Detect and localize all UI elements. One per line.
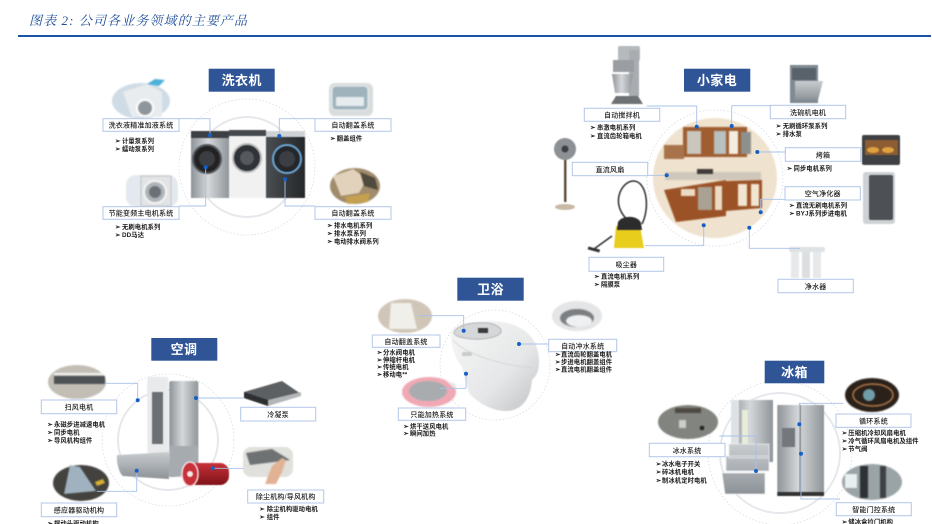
label: auto flush — [549, 339, 617, 352]
list: oven items — [787, 164, 832, 173]
label: auto lid system: 自动翻盖系统 — [331, 121, 375, 130]
list: flush items: 步进电机翻盖组件 — [561, 357, 613, 366]
list: motor items: 无刷电机系列 — [122, 222, 160, 231]
list: lid items — [377, 348, 416, 378]
label: circulation — [836, 414, 911, 427]
heading: bathroom: 卫浴 — [477, 282, 504, 297]
icon: oven — [862, 135, 900, 165]
connector lines — [645, 106, 800, 248]
icon: water purifier — [789, 247, 825, 278]
icon: pink heated seat — [402, 377, 456, 407]
list: lid items: 移动电** — [383, 369, 408, 378]
list: lid items: ➢ — [377, 357, 383, 364]
label: swing motor — [41, 400, 117, 414]
title: 图表 2: 公司各业务领域的主要产品 — [29, 13, 248, 28]
heading: bathroom — [457, 278, 524, 301]
list: purifier items: ➢ — [789, 210, 795, 217]
list: circulation items: ➢ — [842, 446, 848, 453]
list: lid items: 分水阀电机 — [383, 348, 416, 356]
icon: dishwasher — [790, 65, 823, 103]
list: circulation items: ➢ — [842, 430, 848, 437]
list: flush items: 直流电机翻盖组件 — [561, 364, 613, 373]
heading: small appliances: 小家电 — [697, 73, 737, 88]
label: auto lid — [372, 335, 440, 347]
label: condensate pump — [241, 407, 316, 421]
icon: stand mixer — [611, 46, 643, 104]
list: detergent items: ➢ — [115, 138, 121, 145]
list: purifier items: BYJ系列步进电机 — [796, 208, 848, 217]
heading: air conditioner: 空调 — [171, 342, 197, 357]
list: heating items: 烘干送风电机 — [410, 421, 449, 430]
label: heating — [398, 408, 466, 420]
label: water purifier: 净水器 — [805, 282, 827, 291]
icon: washer drum photo — [126, 175, 178, 207]
list: lid items: ➢ — [330, 136, 336, 142]
list: dishwasher items: ➢ — [776, 123, 782, 130]
list: motor items: ➢ — [115, 232, 121, 239]
heading: refrigerator — [765, 361, 824, 383]
icon: kitchen photo — [653, 118, 777, 238]
label: ice water — [649, 443, 725, 457]
label: vacuum: 吸尘器 — [615, 260, 637, 269]
list: dishwasher items: ➢ — [776, 131, 782, 138]
list: dust items: 组件 — [267, 512, 280, 521]
list: swing items: ➢ — [47, 429, 53, 436]
list: dishwasher items — [776, 121, 827, 138]
panel: bathroom — [372, 278, 617, 438]
list: detergent items — [115, 136, 154, 153]
icon: door photo — [842, 464, 902, 500]
list: dust items — [259, 504, 318, 521]
icon: lid closeup photo — [378, 299, 432, 333]
list: circulation items: 冷气循环风扇电机及组件 — [848, 436, 919, 445]
list: heating items: 瞬间加热 — [410, 429, 436, 438]
label: heating: 只能加热系统 — [410, 410, 454, 419]
list: lid items: ➢ — [377, 350, 383, 356]
list: detergent items: 计量泵系列 — [122, 136, 154, 145]
icon: cooling fan photo — [845, 378, 899, 412]
label: sensor drive — [41, 503, 117, 517]
icon: vent photo — [48, 365, 106, 399]
list: flush items: 直流齿轮翻盖电机 — [561, 350, 613, 359]
icon: drain photo — [330, 168, 380, 204]
list: vacuum items: ➢ — [594, 282, 600, 289]
list: ice items — [656, 459, 707, 484]
panel: air conditioner — [41, 338, 324, 524]
list: oven items: 同步电机系列 — [794, 164, 832, 173]
list: vacuum items: 隔膜泵 — [601, 280, 621, 289]
list: motor items — [115, 222, 160, 239]
label: auto lid system lower — [315, 207, 391, 219]
icon: vacuum cleaner — [588, 181, 646, 252]
list: vacuum items: 直流电机系列 — [601, 272, 639, 280]
list: flush items: ➢ — [555, 366, 561, 373]
label: dishwasher motor — [770, 105, 846, 119]
icon: refrigerators — [722, 400, 824, 496]
list: dust items: ➢ — [259, 506, 265, 513]
label: dc fan — [572, 162, 648, 176]
label: auto lid system — [315, 119, 391, 131]
list: ice items: ➢ — [656, 477, 662, 484]
label: auto flush: 自动冲水系统 — [561, 341, 604, 350]
label: detergent system — [103, 119, 179, 131]
list: detergent items: ➢ — [115, 146, 121, 153]
panel: refrigerator — [649, 361, 919, 524]
list: drain items: 排水泵系列 — [334, 228, 366, 238]
list: flush items: ➢ — [555, 352, 561, 359]
icon: lid photo — [329, 83, 373, 116]
list: flush items — [555, 350, 613, 373]
list: swing items: 导风机构组件 — [54, 435, 93, 444]
list: ice items: 制冰机定时电机 — [662, 475, 707, 484]
label: dc fan: 直流风扇 — [596, 165, 624, 174]
panel: small appliances — [554, 46, 900, 293]
label: dishwasher motor: 洗碗机电机 — [790, 108, 826, 117]
label: dust removal: 除尘机构/导风机构 — [256, 492, 316, 501]
list: detergent items: 蠕动泵系列 — [122, 144, 154, 153]
label: water purifier — [778, 279, 853, 293]
list: vacuum items: ➢ — [594, 274, 600, 280]
list: sensor items — [47, 518, 99, 524]
label: smart door — [836, 503, 911, 516]
connector lines — [97, 383, 243, 491]
list: purifier items — [789, 200, 848, 217]
list: mixer items — [590, 123, 642, 140]
list: purifier items: 直流无刷电机系列 — [796, 200, 847, 209]
list: drain items: 电动排水阀系列 — [334, 236, 379, 246]
heading: small appliances — [684, 69, 750, 92]
list: flush items: ➢ — [555, 359, 561, 366]
list: circulation items: 节气阀 — [848, 444, 868, 453]
list: drain items: 排水电机系列 — [334, 220, 372, 230]
list: heating items — [403, 421, 449, 438]
label: ice water: 冰水系统 — [673, 446, 701, 455]
label: dust removal — [248, 490, 324, 503]
list: heating items: ➢ — [403, 431, 409, 438]
list: swing items: ➢ — [47, 421, 53, 428]
list: heating items: ➢ — [403, 423, 409, 430]
icon: three washing machines — [191, 130, 305, 198]
label: oven: 烤箱 — [816, 150, 830, 159]
list: swing items: 永磁步进减速电机 — [54, 419, 106, 428]
icon: toilet — [451, 321, 539, 411]
label: circulation: 循环系统 — [859, 416, 888, 425]
label: air purifier: 空气净化器 — [805, 189, 841, 198]
icon: bowl photo — [552, 301, 602, 331]
list: vacuum items — [594, 272, 639, 289]
icon: control panel photo — [658, 405, 718, 439]
list: door items — [842, 517, 893, 524]
list: circulation items — [842, 428, 919, 453]
icon: duct unit — [244, 381, 301, 406]
icon: air purifier — [863, 172, 895, 224]
list: drain items: ➢ — [327, 230, 333, 238]
list: lid items: 伸缩杆电机 — [383, 355, 416, 364]
list: motor items: DD马达 — [122, 230, 145, 239]
icon: air conditioner units — [117, 377, 229, 486]
list: ice items: ➢ — [656, 469, 662, 476]
list: drain items — [327, 220, 379, 246]
list: ice items: 冰水电子开关 — [662, 459, 701, 468]
label: air purifier — [785, 187, 860, 200]
list: circulation items: ➢ — [842, 438, 848, 445]
list: mixer items: ➢ — [590, 125, 596, 132]
connector lines — [418, 316, 549, 388]
list: dishwasher items: 无刷循环泵系列 — [783, 121, 827, 130]
list: lid items: 传统电机 — [383, 362, 409, 371]
list: lid items: ➢ — [377, 364, 383, 371]
list: ice items: 碎冰机电机 — [662, 467, 695, 476]
label: vacuum — [589, 257, 664, 271]
list: lid items: ➢ — [377, 371, 383, 378]
list: mixer items: 直流齿轮箱电机 — [597, 131, 642, 140]
list: swing items — [47, 419, 106, 444]
list: swing items: ➢ — [47, 437, 53, 444]
connector lines — [719, 403, 843, 499]
label: auto lid: 自动翻盖系统 — [384, 337, 428, 346]
list: oven items: ➢ — [787, 166, 793, 173]
list: drain items: ➢ — [327, 222, 333, 230]
list: dust items: ➢ — [259, 514, 265, 521]
list: ice items: ➢ — [656, 461, 662, 468]
label: mixer: 自动搅拌机 — [604, 110, 640, 120]
heading: air conditioner — [151, 338, 217, 361]
icon: stand fan — [554, 138, 576, 210]
list: motor items: ➢ — [115, 224, 121, 231]
label: condensate pump: 冷凝泵 — [267, 410, 289, 419]
label: detergent system: 洗衣液精准加液系统 — [109, 121, 173, 130]
label: sensor drive: 感应器驱动机构 — [54, 506, 104, 515]
heading: refrigerator: 冰箱 — [781, 365, 808, 380]
connector lines — [179, 119, 315, 206]
label: swing motor: 扫风电机 — [65, 403, 93, 412]
icon: detergent washer photo — [112, 79, 170, 119]
heading: washing machine — [209, 69, 275, 92]
label: main motor system: 节能变频主电机系统 — [109, 209, 173, 218]
label: smart door: 智能门控系统 — [852, 505, 895, 514]
heading: washing machine: 洗衣机 — [222, 73, 262, 88]
label: auto lid system lower: 自动翻盖系统 — [331, 209, 375, 218]
icon: sensor photo — [53, 465, 109, 501]
list: purifier items: ➢ — [789, 202, 795, 209]
list: mixer items: 串激电机系列 — [597, 123, 635, 132]
list: mixer items: ➢ — [590, 133, 596, 140]
list: drain items: ➢ — [327, 238, 333, 246]
list: lid items: 翻盖组件 — [337, 134, 363, 142]
label: oven — [785, 148, 861, 161]
list: swing items: 同步电机 — [54, 427, 80, 436]
icon: hand cleaning photo — [243, 447, 293, 484]
list: lid items — [330, 134, 363, 142]
panel: washing machine — [103, 69, 391, 246]
label: mixer — [584, 108, 660, 121]
list: dust items: 除尘机构驱动电机 — [267, 504, 318, 513]
list: circulation items: 压缩机冷却风扇电机 — [848, 428, 906, 437]
list: dishwasher items: 排水泵 — [783, 129, 802, 138]
label: main motor system — [103, 207, 179, 219]
